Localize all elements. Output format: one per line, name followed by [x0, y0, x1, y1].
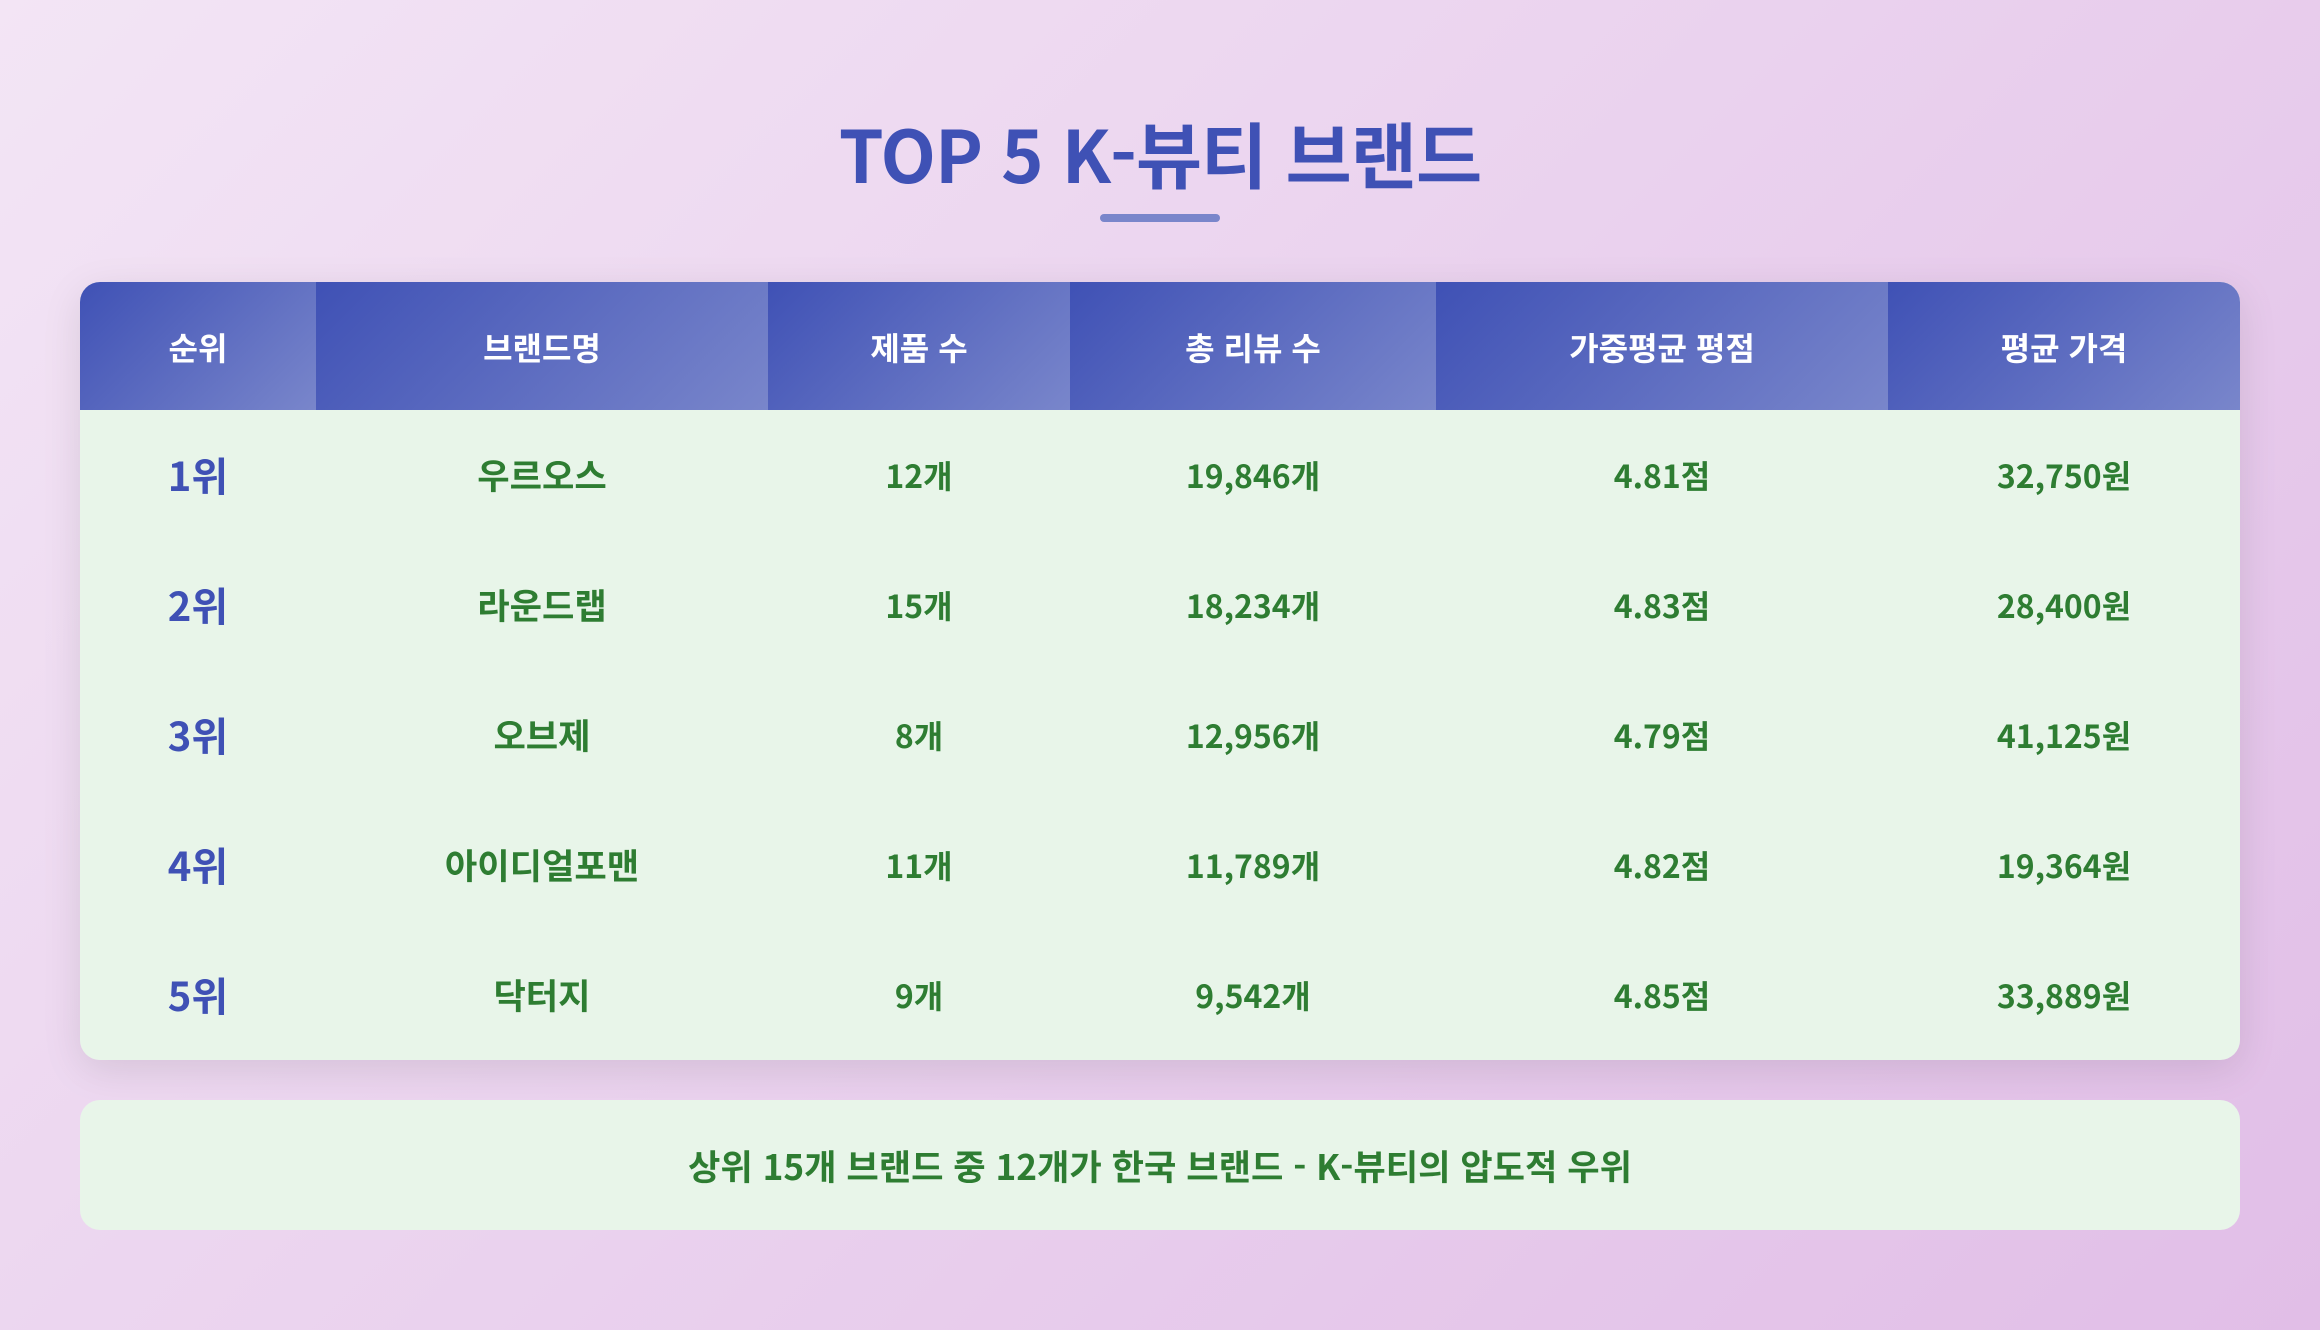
- row: rank 1: 32,750원: [1997, 452, 2131, 498]
- row: rank 3: 오브제: [493, 708, 591, 760]
- row: rank 2: 2위: [168, 575, 228, 633]
- row: rank 2: 18,234개: [1186, 582, 1320, 628]
- row: rank 4: 아이디얼포맨: [445, 838, 639, 890]
- row: rank 3: 8개: [895, 712, 943, 758]
- row: rank 5: 33,889원: [1997, 972, 2131, 1018]
- row: rank 4: 4.82점: [1614, 842, 1710, 888]
- row: rank 5: 9,542개: [1195, 972, 1311, 1018]
- table header row: 총 리뷰 수: [1185, 324, 1321, 370]
- row: rank 1: 4.81점: [1614, 452, 1710, 498]
- row: rank 2: 28,400원: [1997, 582, 2131, 628]
- row: rank 1: 19,846개: [1186, 452, 1320, 498]
- row: rank 5: 4.85점: [1614, 972, 1710, 1018]
- row: rank 3: 4.79점: [1614, 712, 1710, 758]
- row: rank 1: 1위: [168, 445, 228, 503]
- row: rank 5: 닥터지: [493, 968, 591, 1020]
- row: rank 3: 41,125원: [1997, 712, 2131, 758]
- row: rank 3: 3위: [168, 705, 228, 763]
- row: rank 4: 19,364원: [1997, 842, 2131, 888]
- table: top 5 brands: [80, 282, 2240, 1060]
- row: rank 2: [168, 575, 2131, 633]
- row: rank 1: 12개: [885, 452, 953, 498]
- table header row: 가중평균 평점: [1569, 324, 1755, 370]
- table header row: 브랜드명: [483, 324, 601, 370]
- row: rank 2: 15개: [885, 582, 953, 628]
- row: rank 5: 9개: [895, 972, 943, 1018]
- table header row: [80, 282, 2240, 410]
- title underline: [1100, 214, 1220, 222]
- table header row: 평균 가격: [2001, 324, 2127, 370]
- table header row: 제품 수: [870, 324, 968, 370]
- row: rank 3: 12,956개: [1186, 712, 1320, 758]
- row: rank 1: 우르오스: [477, 448, 607, 500]
- callout: summary note: [80, 1100, 2240, 1230]
- row: rank 3: [168, 705, 2131, 763]
- row: rank 4: 11,789개: [1186, 842, 1320, 888]
- row: rank 5: [168, 965, 2131, 1023]
- row: rank 2: 4.83점: [1614, 582, 1710, 628]
- callout: summary note: 상위 15개 브랜드 중 12개가 한국 브랜드 - K-뷰티의 압도적 우위: [688, 1140, 1632, 1190]
- row: rank 4: 11개: [885, 842, 953, 888]
- row: rank 1: [168, 445, 2131, 503]
- row: rank 4: 4위: [168, 835, 228, 893]
- row: rank 5: 5위: [168, 965, 228, 1023]
- title: TOP 5 K-뷰티 브랜드: [839, 99, 1481, 204]
- row: rank 4: [168, 835, 2131, 893]
- row: rank 2: 라운드랩: [477, 578, 607, 630]
- table header row: 순위: [169, 324, 227, 370]
